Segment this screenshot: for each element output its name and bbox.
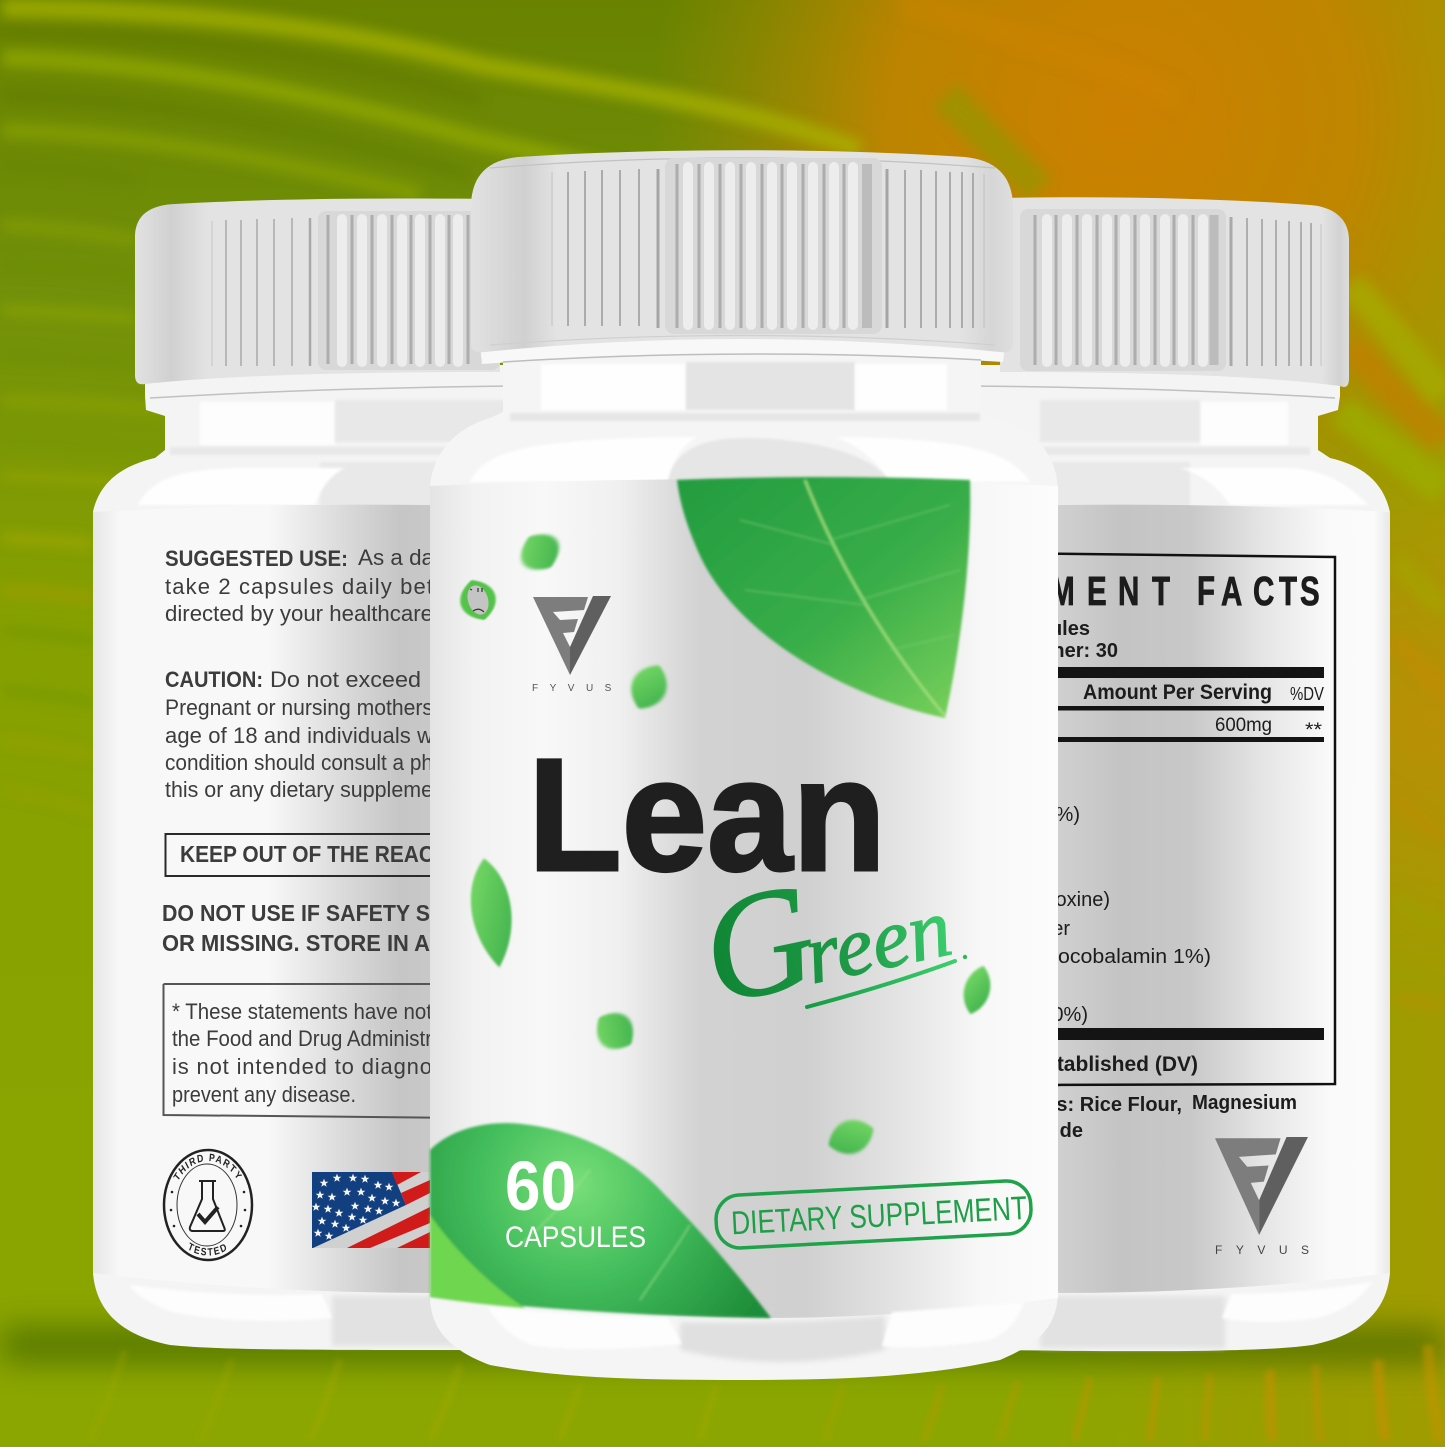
supplement facts panel: ules bbox=[1050, 618, 1090, 640]
logo: fyvus, front: FYVUS bbox=[532, 683, 623, 694]
supplement facts panel: ocobalamin 1%) bbox=[1058, 946, 1211, 968]
label text: left bottle: take 2 capsules daily bet bbox=[165, 574, 433, 599]
cap ribs: right bbox=[1020, 209, 1321, 371]
supplement facts panel: s: Rice Flour, bbox=[1056, 1094, 1182, 1116]
bottle cap: right bbox=[1000, 197, 1349, 387]
label text: left bottle: SUGGESTED USE: bbox=[165, 546, 348, 571]
bottle body: right bbox=[960, 365, 1390, 1351]
supplement facts panel: 600mg bbox=[1215, 715, 1272, 736]
front bottle bbox=[430, 150, 1058, 1380]
neck shading: left bbox=[138, 386, 530, 506]
cap ribs bbox=[552, 158, 984, 334]
logo: fyvus, right bottle bbox=[1215, 1137, 1323, 1257]
supplement facts panel: Magnesium bbox=[1192, 1092, 1297, 1114]
cap ribs: left bbox=[212, 211, 500, 370]
capsule count bbox=[505, 1147, 646, 1254]
label text: left bottle: * These statements have not bbox=[172, 999, 432, 1024]
leaf with dark flecks bbox=[455, 575, 501, 625]
icon: third party tested seal bbox=[162, 1148, 254, 1262]
supplement facts panel: 0%) bbox=[1052, 1004, 1088, 1026]
label text: left bottle bbox=[162, 549, 430, 1119]
supplement facts panel: ** bbox=[1305, 720, 1323, 741]
supplement facts panel: %) bbox=[1056, 804, 1080, 826]
title: Green script: Green bbox=[688, 823, 962, 1036]
bottle silhouette: body bbox=[430, 330, 1058, 1380]
icon: third party tested seal: TESTED bbox=[189, 1242, 226, 1256]
logo: fyvus, right bottle: FYVUS bbox=[1215, 1243, 1323, 1257]
label text: left bottle: the Food and Drug Administr bbox=[172, 1026, 432, 1051]
label text: left bottle: this or any dietary suppleme bbox=[165, 777, 433, 802]
capsule count: 60 bbox=[505, 1147, 576, 1225]
bottle body: left bbox=[93, 365, 530, 1350]
badge: dietary supplement: DIETARY SUPPLEMENT bbox=[730, 1189, 1028, 1241]
supplement facts panel: er bbox=[1052, 918, 1070, 940]
label text: left bottle: DO NOT USE IF SAFETY S bbox=[162, 900, 430, 926]
label text: left bottle: prevent any disease. bbox=[172, 1082, 356, 1107]
label text: left bottle: As a da bbox=[358, 545, 435, 570]
ground shadow beneath the bottles bbox=[0, 1328, 1445, 1362]
label band: right bbox=[1058, 505, 1390, 1293]
icon: third party tested seal: THIRD PARTY bbox=[173, 1154, 242, 1180]
supplement facts panel: Amount Per Serving bbox=[1083, 681, 1272, 704]
title: Lean: Lean bbox=[528, 725, 886, 904]
supplement facts panel bbox=[1040, 554, 1335, 1142]
supplement facts panel: oxine) bbox=[1056, 889, 1110, 911]
small falling leaves bbox=[455, 525, 996, 1161]
right back bottle bbox=[960, 197, 1390, 1351]
label text: left bottle: Pregnant or nursing mothers bbox=[165, 695, 433, 720]
bottom highlights bbox=[488, 1302, 1024, 1362]
supplement facts panel: %DV bbox=[1290, 684, 1324, 704]
label band: left bbox=[93, 505, 430, 1293]
badge: dietary supplement bbox=[715, 1180, 1032, 1249]
label text: left bottle: age of 18 and individuals w bbox=[165, 723, 433, 748]
bottom highlights: left bbox=[129, 1285, 502, 1346]
supplement facts panel: MENT FACTS bbox=[1050, 568, 1320, 614]
label text: left bottle: CAUTION: bbox=[165, 667, 263, 692]
label text: left bottle: condition should consult a ph bbox=[165, 750, 433, 775]
label text: left bottle: directed by your healthcare bbox=[165, 601, 433, 626]
supplement facts panel: de bbox=[1060, 1120, 1083, 1142]
neck shading bbox=[510, 362, 980, 421]
label text: left bottle: KEEP OUT OF THE REAC bbox=[180, 841, 434, 867]
neck shading: right bbox=[970, 386, 1368, 506]
supplement facts panel: tablished (DV) bbox=[1057, 1053, 1198, 1076]
label text: left bottle: OR MISSING. STORE IN A bbox=[162, 930, 430, 956]
shoulder highlights bbox=[470, 437, 1030, 482]
supplement facts panel: ner: 30 bbox=[1052, 640, 1118, 662]
label text: left bottle: Do not exceed bbox=[270, 667, 421, 692]
logo: fyvus, front bbox=[532, 596, 623, 694]
bottle cap: front bbox=[471, 150, 1013, 364]
capsule count: CAPSULES bbox=[505, 1221, 646, 1254]
icon: american flag bbox=[312, 1172, 430, 1248]
big leaf: top bbox=[677, 477, 970, 718]
bottle cap: left bbox=[135, 199, 500, 384]
big leaf: bottom bbox=[430, 1123, 771, 1318]
bottom highlights: right bbox=[1040, 1282, 1372, 1348]
left back bottle bbox=[93, 198, 503, 1350]
label text: left bottle: is not intended to diagno bbox=[172, 1054, 432, 1079]
product label bbox=[430, 479, 1058, 1318]
